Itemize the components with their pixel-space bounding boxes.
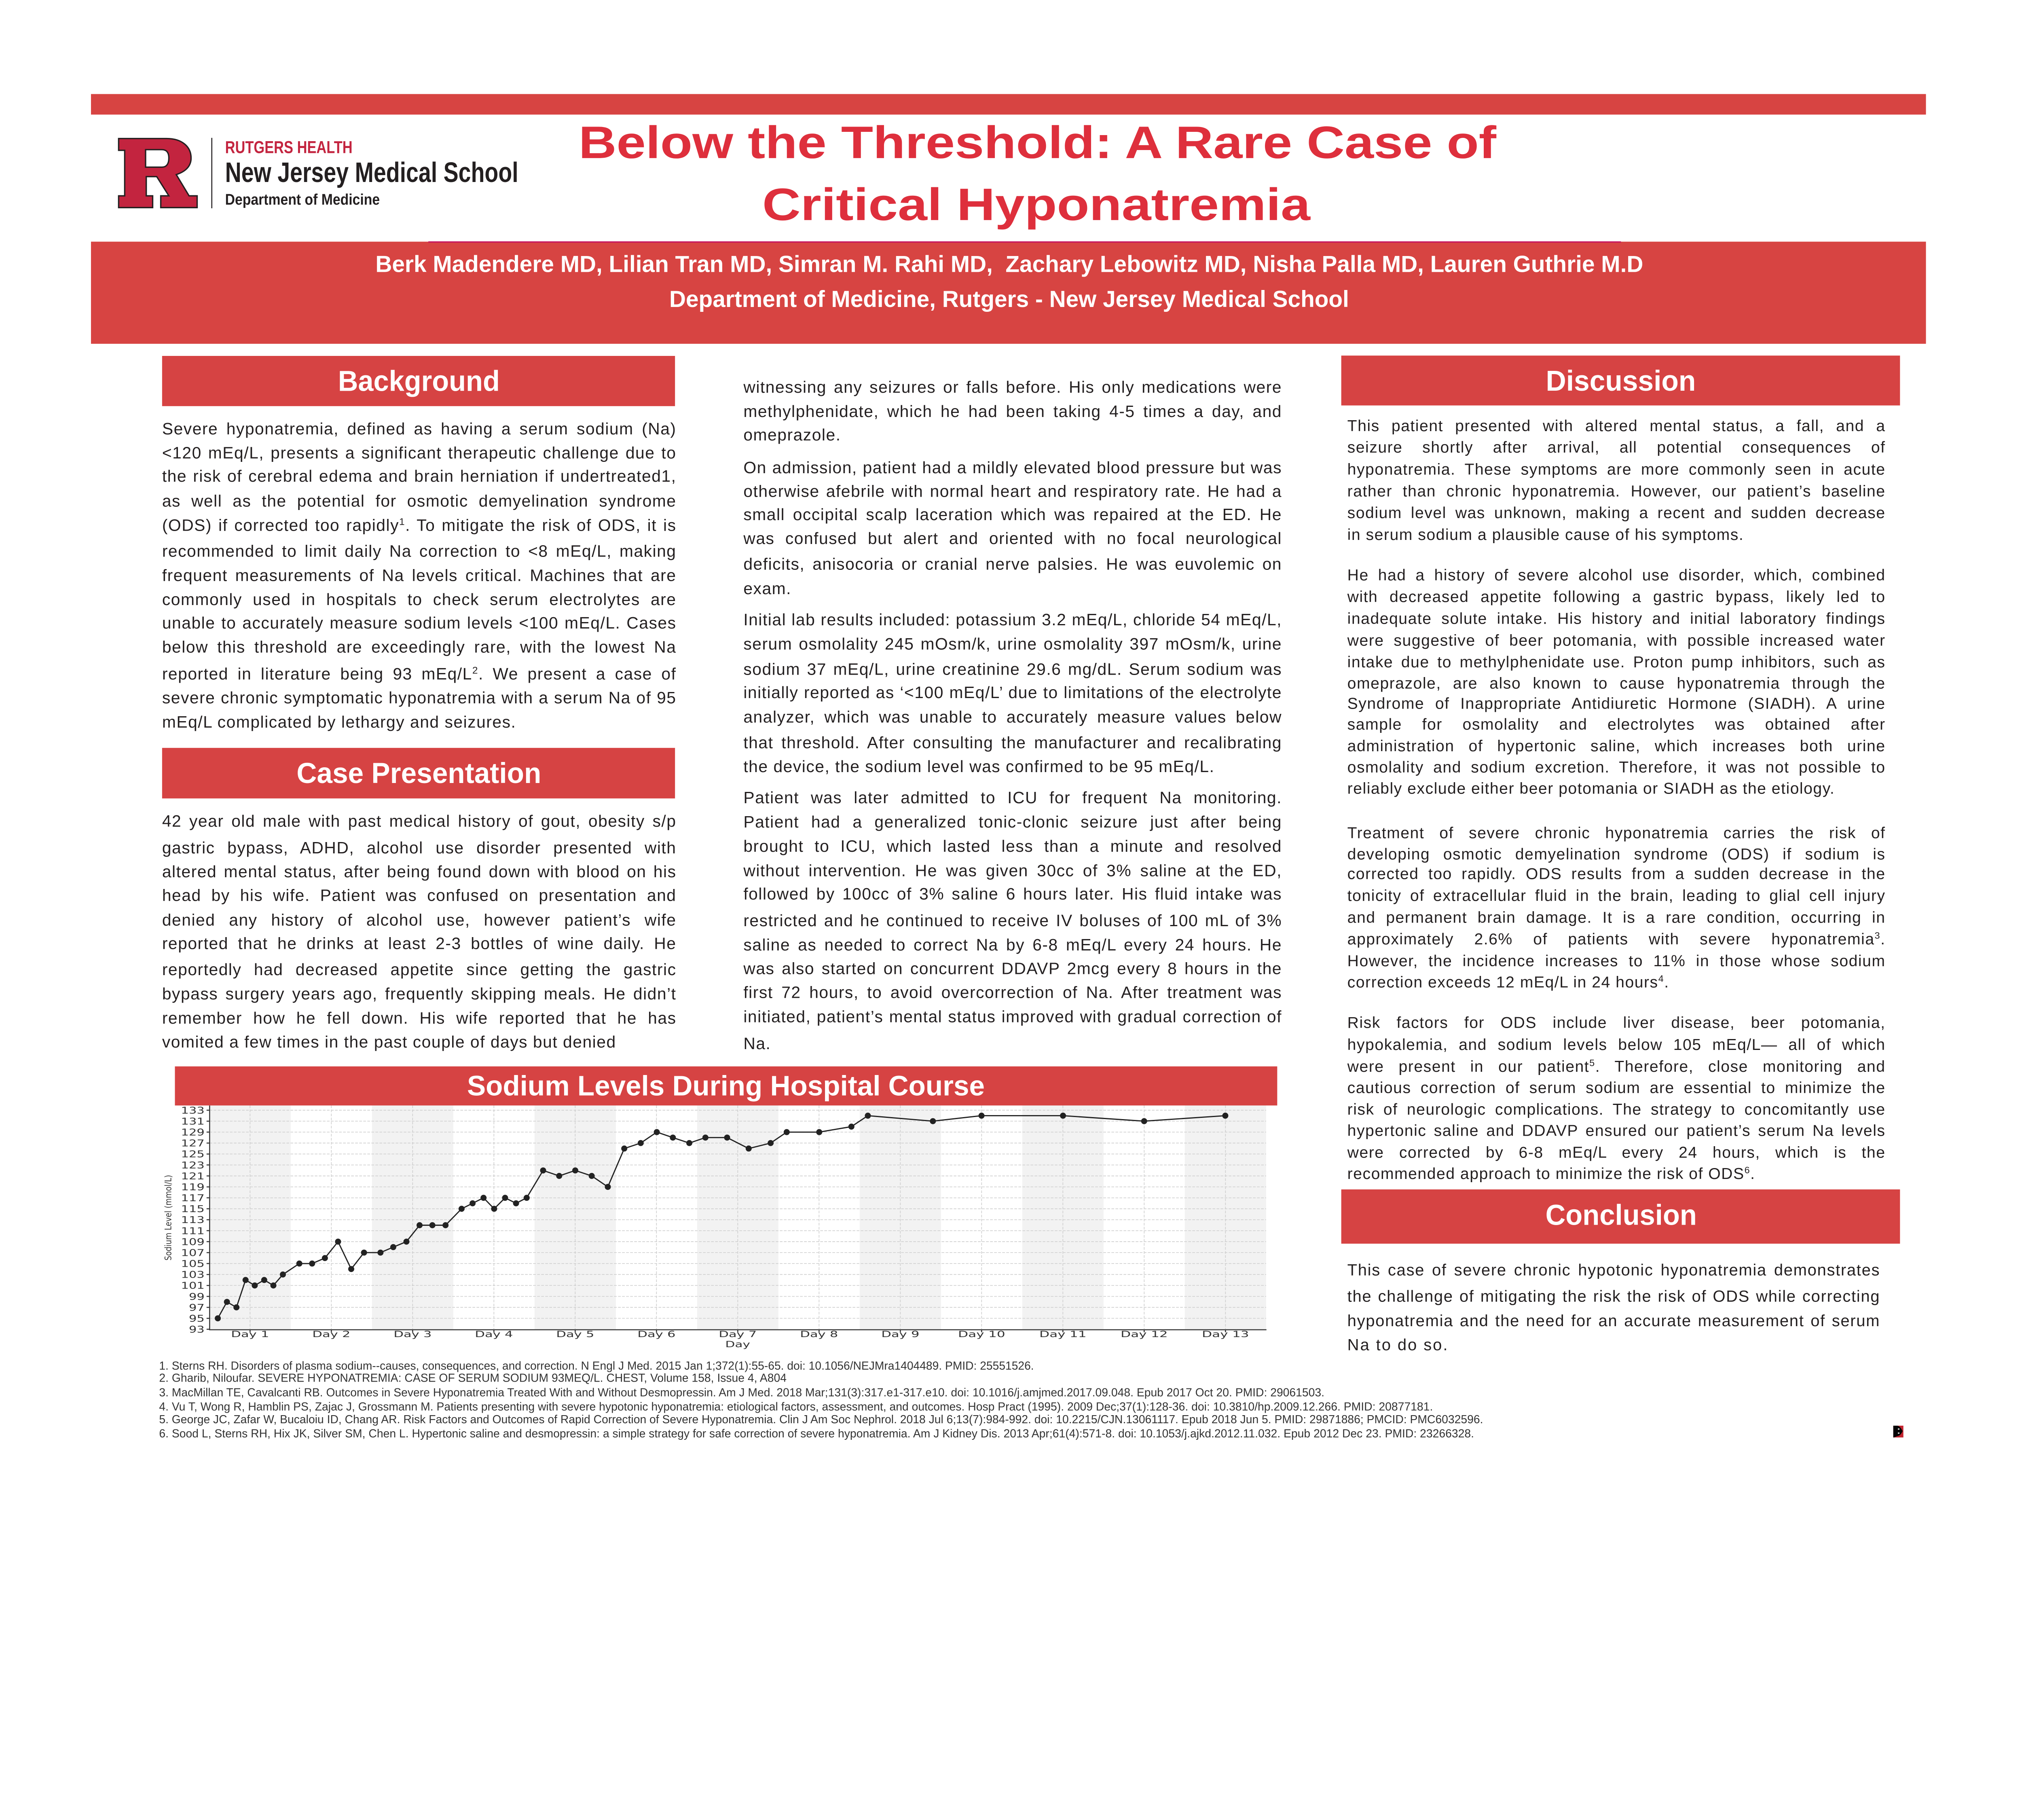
y axis labels: 111 <box>181 1225 205 1236</box>
y axis labels: 97 <box>189 1302 205 1313</box>
text block: Discussion, treatment: Treatment of severe chronic hyponatremia carries the risk of <box>1347 824 1885 842</box>
heading: Sodium Levels During Hospital Course: Sodium Levels During Hospital Course <box>467 1070 985 1101</box>
x axis labels: Day 9 <box>881 1329 919 1340</box>
text block: Case Presentation, lab results: the device, the sodium level was confirmed to be 95 mEq/L. <box>743 758 1214 776</box>
text block: Discussion, treatment: corrected too rapidly. ODS results from a sudden decrease in the <box>1347 865 1885 882</box>
text block: Discussion, etiology: with decreased appetite following a gastric bypass, likely led to <box>1347 587 1885 605</box>
text block: Case Presentation, first part: head by his wife. Patient was confused on presentation and <box>162 887 676 905</box>
y axis labels: 127 <box>181 1138 205 1149</box>
text block: Conclusion <box>1347 1260 1880 1355</box>
text block: Case Presentation, first part: reportedly had decreased appetite since getting the gastric <box>162 961 676 979</box>
text block: Discussion, etiology: administration of hypertonic saline, which increases both urine <box>1347 737 1885 755</box>
text block: Discussion, treatment: However, the incidence increases to 11% in those whose sodium <box>1347 952 1885 970</box>
text block: Case Presentation, admission: was confused but alert and oriented with no focal neurological <box>743 529 1282 548</box>
references: 3. MacMillan TE, Cavalcanti RB. Outcomes in Severe Hyponatremia Treated With and Without Desmopressin. Am J Med. 2018 Mar;131(3):317.e1-317.e10. doi: 10.1016/j.amjmed.2017.09.048. Epub 2017 Oct 20. PMID: 29061503. <box>159 1386 1324 1399</box>
x axis labels: Day 11 <box>1039 1329 1087 1340</box>
text block: Case Presentation, seizures and medications: witnessing any seizures or falls before. His only medications were <box>743 378 1282 396</box>
line chart: sodium levels by day <box>163 1105 1267 1350</box>
text block: Background: recommended to limit daily Na correction to <8 mEq/L, making <box>162 542 676 561</box>
text block: Case Presentation, first part: bypass surgery years ago, frequently skipping meals. He didn’t <box>162 985 676 1003</box>
icon: small corner mark <box>1893 1426 1904 1437</box>
x axis labels: Day 4 <box>475 1329 513 1340</box>
text block: Case Presentation, ICU course: without intervention. He was given 30cc of 3% saline at the ED, <box>743 862 1282 880</box>
logo text: New Jersey Medical School: New Jersey Medical School <box>225 157 518 188</box>
x axis title: Day <box>725 1340 750 1350</box>
text block: Discussion, presentation: seizure shortly after arrival, all potential consequences of <box>1347 438 1885 456</box>
text block: Case Presentation, ICU course: saline as needed to correct Na by 6-8 mEq/L every 24 hours. He <box>743 936 1282 954</box>
y axis labels: 93 <box>189 1324 205 1335</box>
text block: Case Presentation, admission: small occipital scalp laceration which was repaired at the ED. He <box>743 506 1282 524</box>
text block: Case Presentation, seizures and medications <box>743 377 1282 445</box>
y axis labels: 119 <box>181 1181 205 1193</box>
text block: Discussion, presentation <box>1347 416 1885 545</box>
x axis labels: Day 2 <box>312 1329 350 1340</box>
text block: Background: unable to accurately measure sodium levels <100 mEq/L. Cases <box>162 614 676 632</box>
y axis labels: 117 <box>181 1192 205 1204</box>
text block: Discussion, treatment: correction exceeds 12 mEq/L in 24 hours4. <box>1347 973 1669 991</box>
text block: Case Presentation, ICU course: brought to ICU, which lasted less than a minute and resolved <box>743 837 1282 855</box>
x axis labels: Day 3 <box>393 1329 431 1340</box>
text block: Conclusion: hyponatremia and the need for an accurate measurement of serum <box>1347 1312 1880 1330</box>
text block: Discussion, risk factors: recommended approach to minimize the risk of ODS6. <box>1347 1164 1756 1182</box>
x axis labels: Day 12 <box>1121 1329 1168 1340</box>
text block: Discussion, presentation: sodium level was unknown, making a recent and sudden decrease <box>1347 504 1885 521</box>
y axis labels: 95 <box>189 1313 205 1324</box>
text block: Discussion, etiology: intake due to methylphenidate use. Proton pump inhibitors, such as <box>1347 653 1885 671</box>
heading: Background: Background <box>338 365 500 398</box>
text block: Background: reported in literature being 93 mEq/L2. We present a case of <box>162 665 676 683</box>
text block: Case Presentation, ICU course: followed by 100cc of 3% saline 6 hours later. His fluid intake was <box>743 885 1282 903</box>
x axis labels <box>231 1329 1249 1340</box>
text block: Discussion, presentation: rather than chronic hyponatremia. However, our patient’s baseline <box>1347 482 1885 500</box>
text block: Discussion, etiology: inadequate solute intake. His history and initial laboratory findings <box>1347 609 1885 627</box>
heading: Discussion <box>1341 356 1900 405</box>
text block: Discussion, presentation: in serum sodium a plausible cause of his symptoms. <box>1347 525 1744 543</box>
y axis labels: 113 <box>181 1214 205 1225</box>
text block: Discussion, etiology: osmolality and sodium excretion. Therefore, it was not possible to <box>1347 758 1885 776</box>
text block: Case Presentation, admission: otherwise afebrile with normal heart and respiratory rate. He had a <box>743 482 1282 501</box>
references: 2. Gharib, Niloufar. SEVERE HYPONATREMIA: CASE OF SERUM SODIUM 93MEQ/L. CHEST, Volume 158, Issue 4, A804 <box>159 1372 787 1385</box>
text block: Discussion, risk factors: cautious correction of serum sodium are essential to minimize the <box>1347 1079 1885 1096</box>
x axis labels: Day 7 <box>719 1329 757 1340</box>
data markers <box>215 1113 1228 1321</box>
text block: Case Presentation, seizures and medications: methylphenidate, which he had been taking 4-5 times a day, and <box>743 402 1282 421</box>
y axis labels: 115 <box>181 1203 205 1215</box>
logo: Rutgers Health New Jersey Medical School <box>118 138 518 208</box>
text block: Background: the risk of cerebral edema and brain herniation if undertreated1, <box>162 467 676 485</box>
text block: Case Presentation, lab results: sodium 37 mEq/L, urine creatinine 29.6 mg/dL. Serum sodium was <box>743 660 1282 679</box>
text block: Case Presentation, lab results <box>743 610 1282 777</box>
text block: Case Presentation, ICU course: Na. <box>743 1035 771 1053</box>
icon: block letter R <box>118 138 197 207</box>
y axis labels: 101 <box>181 1280 205 1291</box>
text block: Discussion, etiology: Syndrome of Inappropriate Antidiuretic Hormone (SIADH). A urine <box>1347 694 1885 712</box>
text block: Case Presentation, admission: exam. <box>743 580 791 598</box>
text block: Discussion, etiology <box>1347 565 1885 798</box>
authors banner <box>91 241 1926 344</box>
x axis labels: Day 13 <box>1202 1329 1249 1340</box>
text block: Case Presentation, lab results: Initial lab results included: potassium 3.2 mEq/L, chloride 54 mEq/L, <box>743 611 1282 629</box>
y axis title: Sodium Level (mmol/L) <box>163 1175 173 1261</box>
x axis labels: Day 8 <box>800 1329 838 1340</box>
text block: Discussion, etiology: reliably exclude either beer potomania or SIADH as the etiology. <box>1347 779 1835 797</box>
text block: Discussion, risk factors: were present in our patient5. Therefore, close monitoring and <box>1347 1057 1885 1075</box>
y axis labels: 129 <box>181 1127 205 1138</box>
x axis labels: Day 10 <box>958 1329 1005 1340</box>
text block: Conclusion: the challenge of mitigating the risk the risk of ODS while correcting <box>1347 1287 1880 1306</box>
text block: Case Presentation, admission <box>743 458 1282 599</box>
text block: Conclusion: Na to do so. <box>1347 1336 1449 1354</box>
text block: Case Presentation, first part: denied any history of alcohol use, however patient’s wife <box>162 911 676 929</box>
text block: Case Presentation, admission: deficits, anisocoria or cranial nerve palsies. He was euvolemic on <box>743 555 1282 574</box>
text block: Case Presentation, ICU course: restricted and he continued to receive IV boluses of 100 mL of 3% <box>743 912 1282 930</box>
heading: Case Presentation <box>162 748 675 798</box>
text block: Background: frequent measurements of Na levels critical. Machines that are <box>162 567 676 585</box>
text block: Background: severe chronic symptomatic hyponatremia with a serum Na of 95 <box>162 689 676 707</box>
text block: Case Presentation, ICU course: Patient had a generalized tonic-clonic seizure just after being <box>743 813 1282 831</box>
text block: Case Presentation, first part: gastric bypass, ADHD, alcohol use disorder presented with <box>162 839 676 857</box>
references: 5. George JC, Zafar W, Bucaloiu ID, Chang AR. Risk Factors and Outcomes of Rapid Correction of Severe Hyponatremia. Clin J Am Soc Nephrol. 2018 Jul 6;13(7):984-992. doi: 10.2215/CJN.13061117. Epub 2018 Jun 5. PMID: 29871886; PMCID: PMC6032596. <box>159 1413 1483 1426</box>
x axis labels: Day 6 <box>637 1329 675 1340</box>
text block: Background: Severe hyponatremia, defined as having a serum sodium (Na) <box>162 420 676 438</box>
heading: Conclusion: Conclusion <box>1546 1199 1697 1231</box>
text block: Case Presentation, first part: vomited a few times in the past couple of days but denied <box>162 1033 616 1051</box>
heading: Background <box>162 356 675 406</box>
logo text: Department of Medicine: Department of Medicine <box>225 191 380 208</box>
text block: Case Presentation, ICU course <box>743 788 1282 1054</box>
text block: Case Presentation, ICU course: first 72 hours, to avoid overcorrection of Na. After treatment was <box>743 984 1282 1002</box>
y axis labels: 131 <box>181 1115 205 1127</box>
y axis labels: 125 <box>181 1149 205 1160</box>
text block: Discussion, risk factors <box>1347 1012 1885 1184</box>
text block: Case Presentation, first part <box>162 811 676 1052</box>
title <box>579 117 1497 230</box>
text block: Background: as well as the potential for osmotic demyelination syndrome <box>162 492 676 510</box>
text block: Discussion, etiology: were suggestive of beer potomania, with possible increased water <box>1347 631 1885 649</box>
text block: Background: <120 mEq/L, presents a significant therapeutic challenge due to <box>162 444 676 462</box>
text block: Case Presentation, lab results: initially reported as ‘<100 mEq/L’ due to limitations of the electrolyte <box>743 684 1282 702</box>
logo text: Rutgers Health: RUTGERS HEALTH <box>225 138 353 157</box>
text block: Discussion, presentation: hyponatremia. These symptoms are more commonly seen in acute <box>1347 460 1885 478</box>
text block: Case Presentation, lab results: that threshold. After consulting the manufacturer and recalibrating <box>743 734 1282 752</box>
text block: Case Presentation, first part: reported that he drinks at least 2-3 bottles of wine daily. He <box>162 935 676 953</box>
heading: Sodium Levels During Hospital Course <box>175 1067 1277 1105</box>
text block: Background: (ODS) if corrected too rapidly1. To mitigate the risk of ODS, it is <box>162 516 676 535</box>
text block: Case Presentation, ICU course: Patient was later admitted to ICU for frequent Na monitoring. <box>743 789 1282 807</box>
text block: Discussion, risk factors: were corrected by 6-8 mEq/L every 24 hours, which is the <box>1347 1143 1885 1161</box>
y axis labels <box>181 1105 205 1335</box>
text block: Discussion, treatment: tonicity of extracellular fluid in the brain, leading to glial cell injury <box>1347 887 1885 904</box>
x axis labels: Day 1 <box>231 1329 269 1340</box>
data line <box>218 1116 1225 1318</box>
heading: Case Presentation: Case Presentation <box>296 757 541 789</box>
logo divider <box>211 138 212 208</box>
text block: Discussion, etiology: He had a history of severe alcohol use disorder, which, combined <box>1347 566 1885 584</box>
text block: Case Presentation, admission: On admission, patient had a mildly elevated blood pressure but was <box>743 459 1282 477</box>
text block: Discussion, treatment: developing osmotic demyelination syndrome (ODS) if sodium is <box>1347 845 1885 863</box>
y axis labels: 103 <box>181 1269 205 1280</box>
text block: Discussion, etiology: omeprazole, are also known to cause hyponatremia through the <box>1347 674 1885 692</box>
y axis labels: 121 <box>181 1170 205 1182</box>
text block: Case Presentation, first part: remember how he fell down. His wife reported that he has <box>162 1009 676 1027</box>
x axis labels: Day 5 <box>556 1329 594 1340</box>
text block: Discussion, etiology: sample for osmolality and electrolytes was obtained after <box>1347 715 1885 733</box>
text block: Discussion, treatment: approximately 2.6% of patients with severe hyponatremia3. <box>1347 930 1885 948</box>
text block: Discussion, treatment: and permanent brain damage. It is a rare condition, occurring in <box>1347 908 1885 926</box>
y axis labels: 133 <box>181 1105 205 1116</box>
affiliation: Department of Medicine, Rutgers - New Jersey Medical School <box>669 286 1349 312</box>
y axis labels: 123 <box>181 1160 205 1171</box>
text block: Background: below this threshold are exceedingly rare, with the lowest Na <box>162 638 676 656</box>
text block: Discussion, risk factors: hypokalemia, and sodium levels below 105 mEq/L— all of which <box>1347 1035 1885 1053</box>
y axis labels: 99 <box>189 1291 205 1302</box>
references <box>159 1360 1483 1440</box>
references: 1. Sterns RH. Disorders of plasma sodium--causes, consequences, and correction. N Engl J Med. 2015 Jan 1;372(1):55-65. doi: 10.1056/NEJMra1404489. PMID: 25551526. <box>159 1360 1034 1373</box>
text block: Discussion, treatment <box>1347 823 1885 992</box>
text block: Discussion, risk factors: hypertonic saline and DDAVP ensured our patient’s serum Na levels <box>1347 1121 1885 1139</box>
shaded alternate day bands <box>209 1105 1266 1329</box>
text block: Case Presentation, ICU course: was also started on concurrent DDAVP 2mcg every 8 hours in the <box>743 959 1282 978</box>
y axis labels: 107 <box>181 1247 205 1258</box>
text block: Conclusion: This case of severe chronic hypotonic hyponatremia demonstrates <box>1347 1261 1880 1279</box>
text block: Discussion, risk factors: risk of neurologic complications. The strategy to concomitantly use <box>1347 1100 1885 1118</box>
text block: Background <box>162 419 676 732</box>
text block: Discussion, risk factors: Risk factors for ODS include liver disease, beer potomania, <box>1347 1014 1885 1031</box>
authors: Berk Madendere MD, Lilian Tran MD, Simran M. Rahi MD, Zachary Lebowitz MD, Nisha Palla MD, Lauren Guthrie M.D <box>375 252 1643 277</box>
references: 4. Vu T, Wong R, Hamblin PS, Zajac J, Grossmann M. Patients presenting with severe hypotonic hyponatremia: etiological factors, assessment, and outcomes. Hosp Pract (1995). 2009 Dec;37(1):128-36. doi: 10.3810/hp.2009.12.266. PMID: 20877181. <box>159 1400 1433 1414</box>
text block: Discussion, presentation: This patient presented with altered mental status, a fall, and a <box>1347 417 1885 434</box>
text block: Case Presentation, lab results: analyzer, which was unable to accurately measure values below <box>743 708 1282 726</box>
title: Critical Hyponatremia <box>762 179 1311 230</box>
y axis labels: 105 <box>181 1258 205 1270</box>
text block: Case Presentation, first part: altered mental status, after being found down with blood on his <box>162 863 676 881</box>
text block: Background: mEq/L complicated by lethargy and seizures. <box>162 713 516 731</box>
text block: Background: commonly used in hospitals to check serum electrolytes are <box>162 590 676 609</box>
text block: Case Presentation, lab results: serum osmolality 245 mOsm/k, urine osmolality 397 mOsm/k, urine <box>743 635 1282 653</box>
text block: Case Presentation, ICU course: initiated, patient’s mental status improved with gradual correction of <box>743 1008 1282 1026</box>
text block: Case Presentation, first part: 42 year old male with past medical history of gout, obesity s/p <box>162 812 676 830</box>
heading: Conclusion <box>1341 1189 1900 1244</box>
references: 6. Sood L, Sterns RH, Hix JK, Silver SM, Chen L. Hypertonic saline and desmopressin: a simple strategy for safe correction of severe hyponatremia. Am J Kidney Dis. 2013 Apr;61(4):571-8. doi: 10.1053/j.ajkd.2012.11.032. Epub 2012 Dec 23. PMID: 23266328. <box>159 1427 1474 1440</box>
heading: Discussion: Discussion <box>1546 365 1696 397</box>
top red bar <box>91 94 1926 114</box>
y axis labels: 109 <box>181 1236 205 1247</box>
text block: Case Presentation, seizures and medications: omeprazole. <box>743 426 841 444</box>
title: Below the Threshold: A Rare Case of <box>579 117 1497 168</box>
